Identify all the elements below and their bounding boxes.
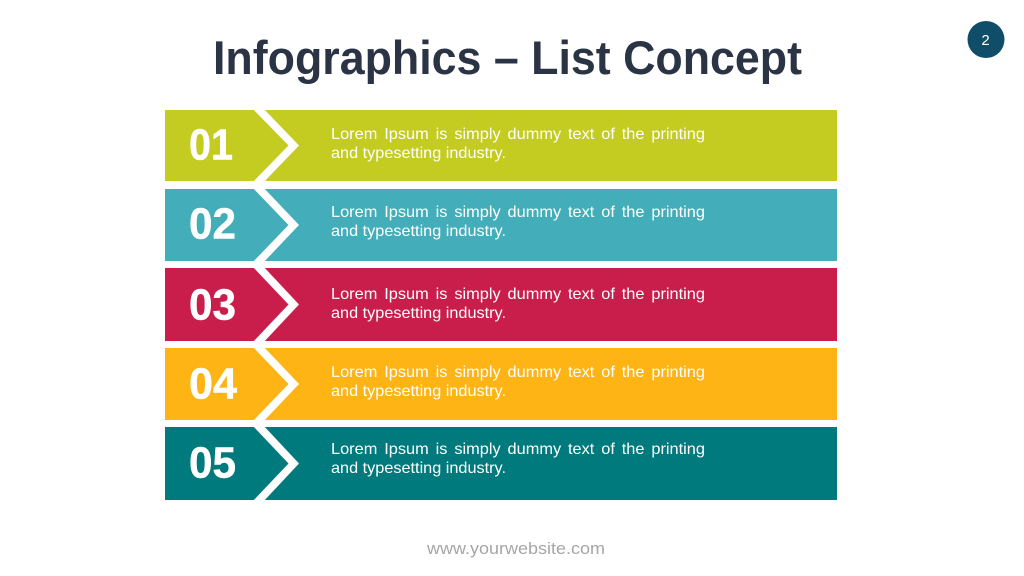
chevron 01 [251, 107, 299, 184]
list row 03 [165, 265, 837, 344]
text 04: Lorem Ipsum is simply dummy text of the printing [331, 364, 705, 381]
text 04: and typesetting industry. [331, 383, 506, 400]
chevron 02 [251, 186, 299, 264]
page number badge: 2 [981, 32, 990, 49]
title: Infographics – List Concept [213, 31, 802, 84]
text 01 [331, 126, 705, 162]
chevron 03 [251, 265, 299, 344]
text 05 [331, 441, 705, 477]
number 01: 01 [189, 120, 233, 170]
text 02 [331, 204, 705, 240]
number 03: 03 [189, 280, 236, 330]
text 03: and typesetting industry. [331, 305, 506, 322]
chevron 04 [251, 345, 299, 423]
text 01: Lorem Ipsum is simply dummy text of the printing [331, 126, 705, 143]
text 01: and typesetting industry. [331, 145, 506, 162]
text 05: and typesetting industry. [331, 460, 506, 477]
list row 04 [165, 345, 837, 423]
list row 05 [165, 424, 837, 503]
text 03: Lorem Ipsum is simply dummy text of the printing [331, 286, 705, 303]
website footer: www.yourwebsite.com [426, 539, 605, 558]
number 05: 05 [189, 438, 236, 488]
list row 02 [165, 186, 837, 264]
text 02: Lorem Ipsum is simply dummy text of the printing [331, 204, 705, 221]
chevron 05 [251, 424, 299, 503]
text 03 [331, 286, 705, 322]
page number badge [968, 21, 1004, 58]
text 04 [331, 364, 705, 400]
list row 01 [165, 107, 837, 184]
text 02: and typesetting industry. [331, 223, 506, 240]
text 05: Lorem Ipsum is simply dummy text of the printing [331, 441, 705, 458]
number 04: 04 [189, 360, 238, 408]
number 02: 02 [189, 200, 236, 248]
